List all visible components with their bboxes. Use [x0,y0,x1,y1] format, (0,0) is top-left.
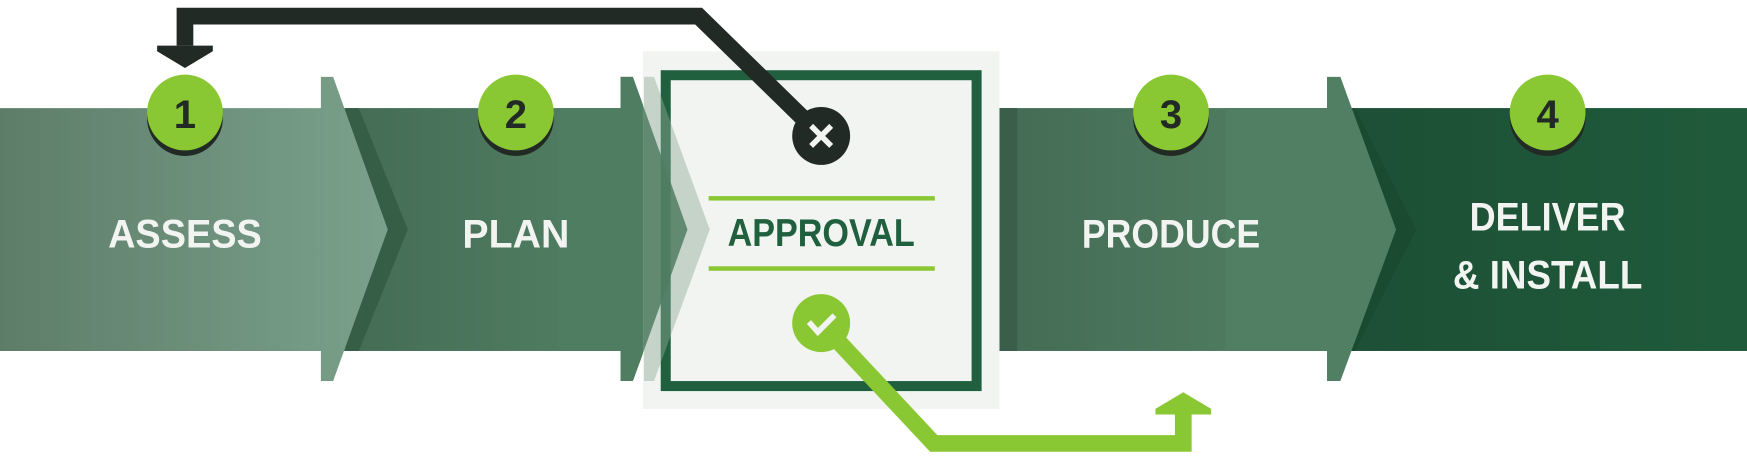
badge 2: 2 [505,93,527,137]
label: assess: ASSESS [108,212,262,256]
label: deliver & install [1453,196,1642,298]
badge 4: 4 [1536,93,1559,137]
approval panel [621,51,999,409]
label: plan: PLAN [462,212,569,256]
approval label: APPROVAL [728,212,915,255]
badge 4 [1510,75,1586,156]
band: deliver [1340,108,1747,351]
label: deliver & install: & INSTALL [1453,254,1642,298]
arrow: approved to produce [821,323,1211,443]
badge 3 [1133,75,1209,156]
label: produce: PRODUCE [1082,212,1260,256]
label: deliver & install: DELIVER [1470,196,1626,240]
arrow: rejection loop back to assess [157,16,821,136]
badge 1: 1 [174,93,196,137]
badge 1 [147,75,223,156]
band: plan [334,77,657,381]
badge 3: 3 [1160,93,1182,137]
icon: approve check [792,294,850,352]
icon: reject x [792,107,850,165]
badge 2 [478,75,554,156]
band: assess [0,77,388,381]
band: produce [999,77,1396,381]
